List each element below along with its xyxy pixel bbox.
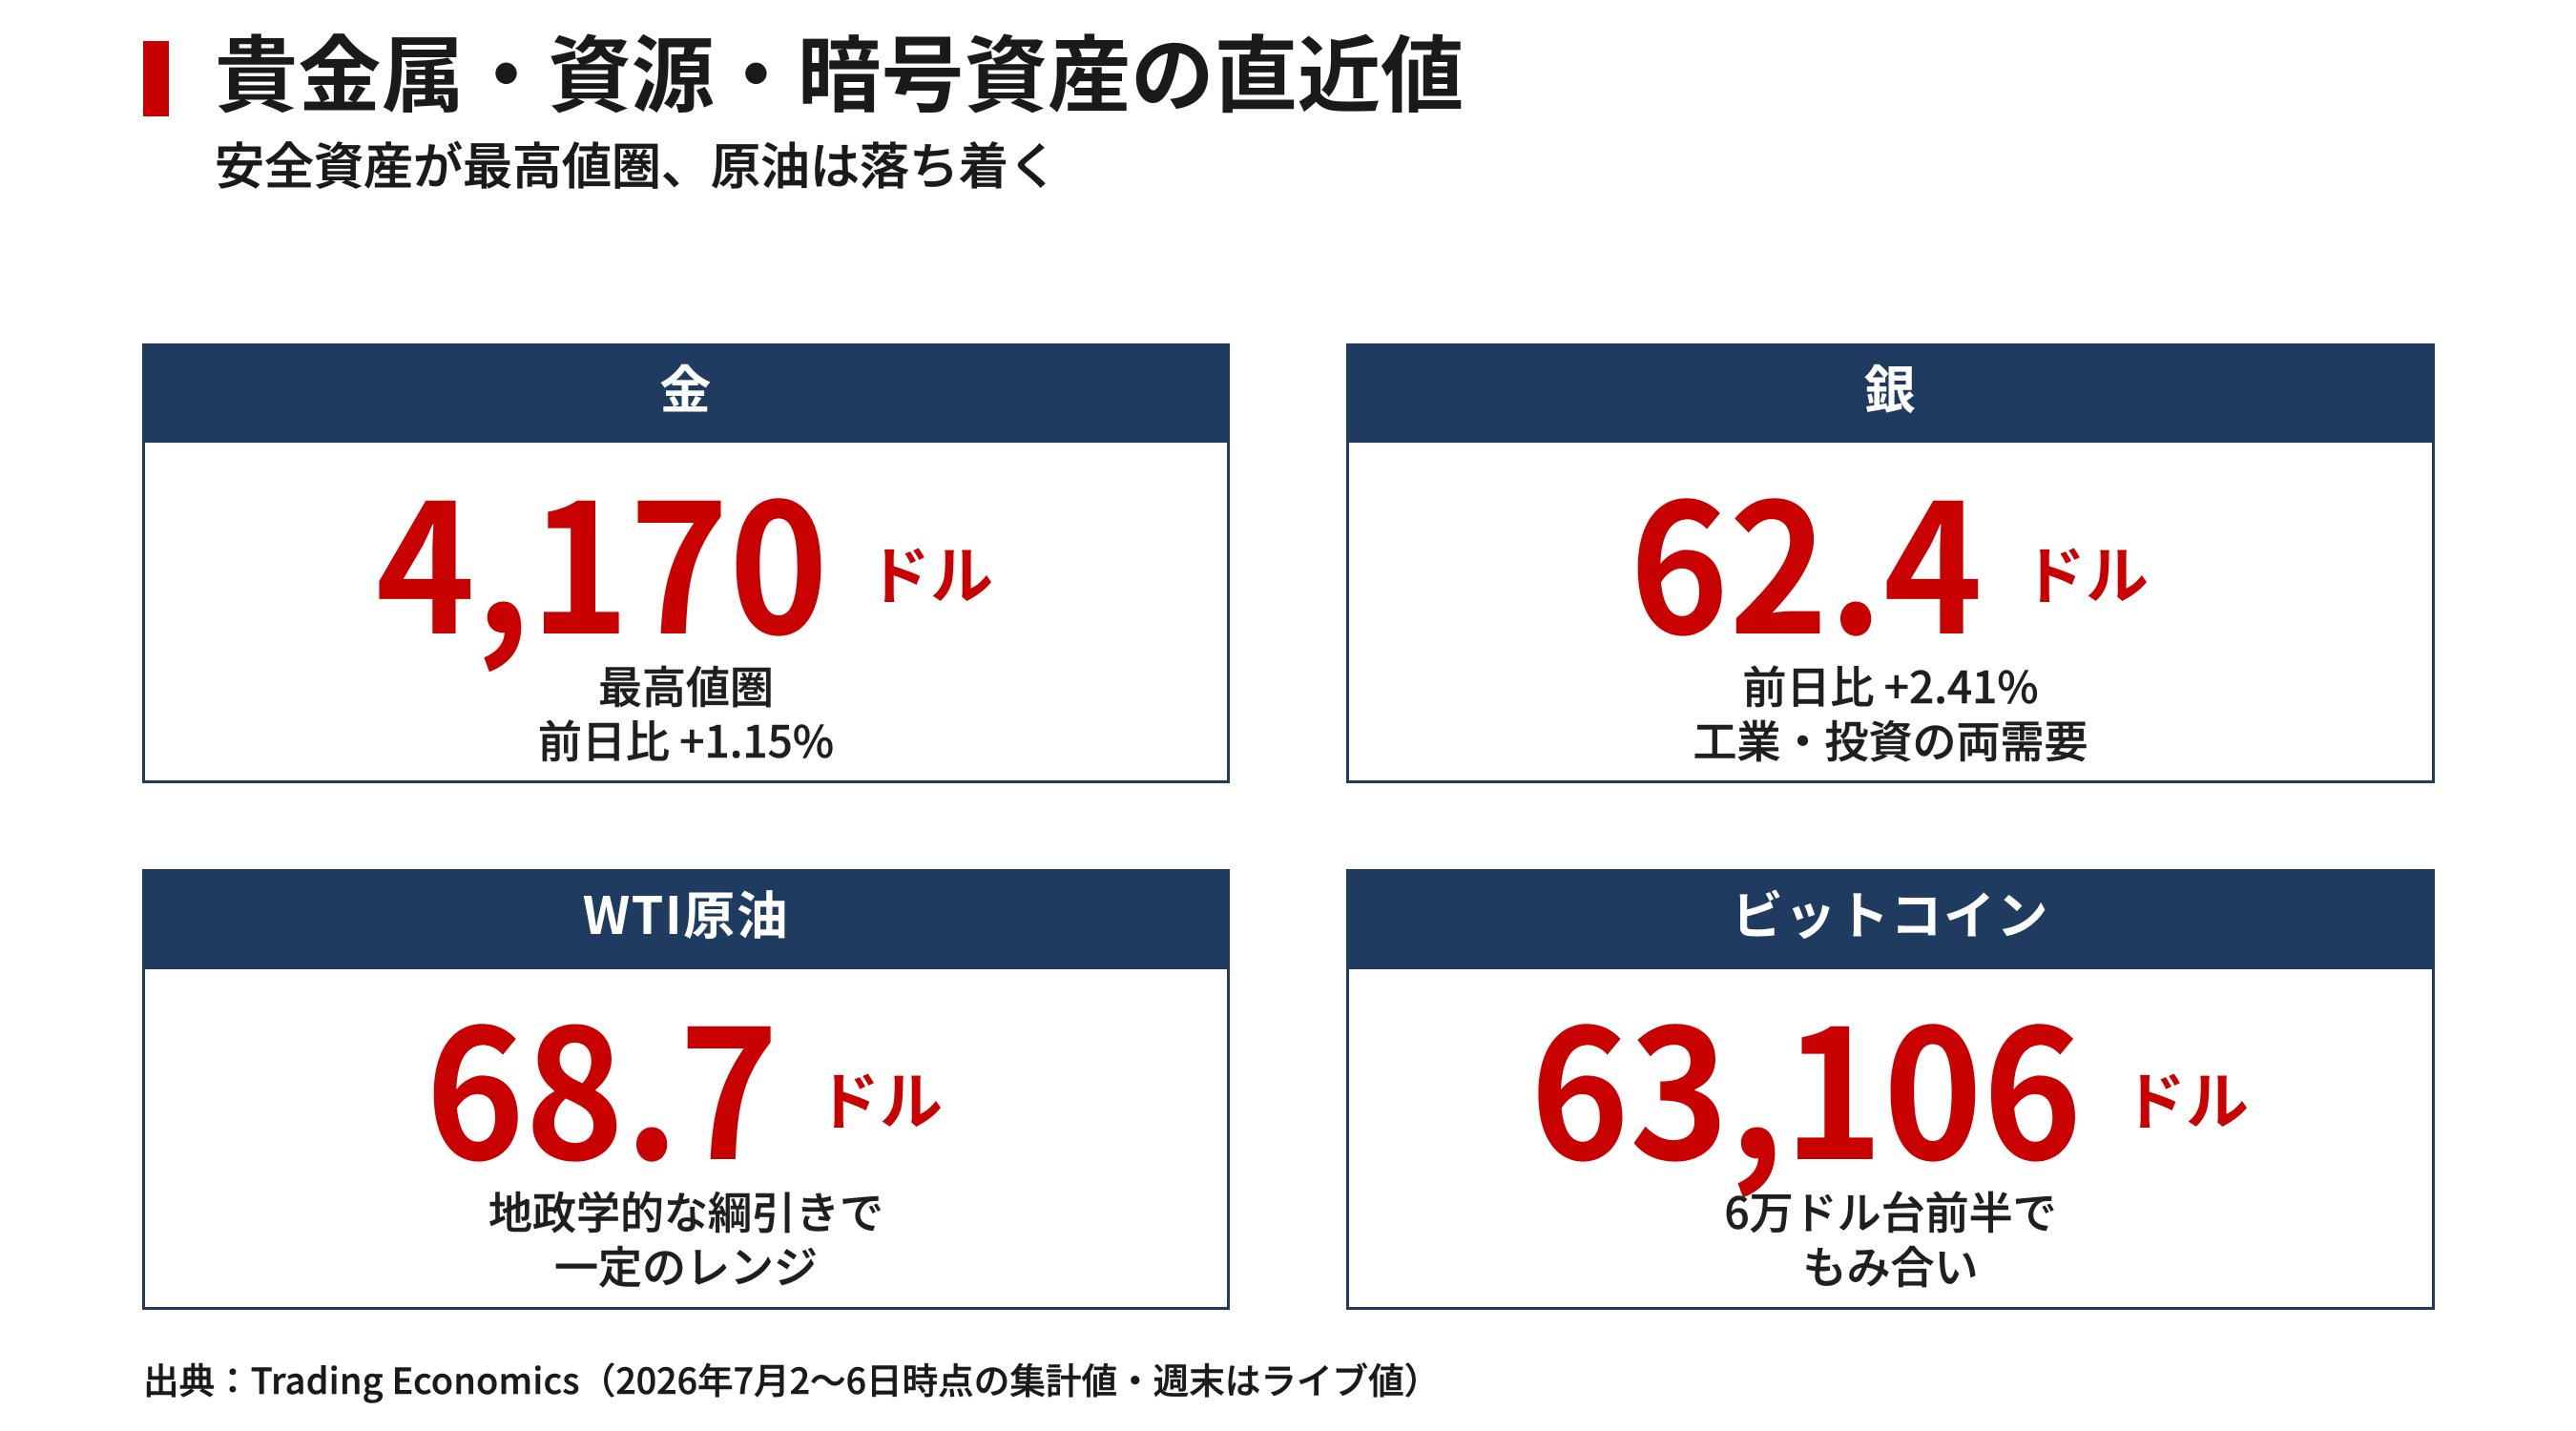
- note: gold: 前日比 +1.15%: [538, 708, 834, 771]
- note: bitcoin: もみ合い: [1803, 1234, 1979, 1296]
- value: gold price: 4,170: [376, 426, 828, 686]
- note: WTI: 一定のレンジ: [554, 1234, 818, 1296]
- panel heading: gold: [142, 343, 1230, 443]
- note: gold: 最高値圏: [598, 653, 774, 716]
- unit: gold: ドル: [867, 526, 993, 617]
- note: bitcoin: [1724, 1179, 2057, 1296]
- panel heading: silver: [1346, 343, 2435, 443]
- unit: silver: ドル: [2023, 526, 2149, 617]
- panel heading: gold: 金: [659, 348, 713, 424]
- title accent bar: [143, 41, 169, 116]
- value: silver price: 62.4: [1630, 426, 1983, 686]
- note: silver: [1693, 653, 2088, 771]
- panel: gold: [142, 343, 1230, 783]
- panel heading: bitcoin: ビットコイン: [1732, 874, 2049, 949]
- note: WTI: 地政学的な綱引きで: [488, 1179, 883, 1242]
- panel heading: WTI crude: [142, 869, 1230, 969]
- unit: bitcoin: ドル: [2123, 1051, 2249, 1143]
- note: WTI: [488, 1179, 883, 1296]
- value: bitcoin price: 63,106: [1530, 952, 2082, 1212]
- panel: silver: [1346, 343, 2435, 783]
- value: WTI price: 68.7: [426, 952, 779, 1212]
- panel heading: silver: 銀: [1864, 348, 1917, 424]
- panel: bitcoin: [1346, 869, 2435, 1310]
- source note: 出典：Trading Economics（2026年7月2〜6日時点の集計値・週末はライブ値）: [143, 1352, 1440, 1404]
- unit: WTI: ドル: [817, 1051, 943, 1143]
- panel heading: bitcoin: [1346, 869, 2435, 969]
- subtitle: 安全資産が最高値圏、原油は落ち着く: [215, 127, 1058, 198]
- panel: WTI crude: [142, 869, 1230, 1310]
- note: bitcoin: 6万ドル台前半で: [1724, 1179, 2057, 1242]
- panel heading: WTI crude: WTI原油: [583, 874, 789, 949]
- note: gold: [538, 653, 834, 771]
- title: 貴金属・資源・暗号資産の直近値: [215, 10, 1464, 130]
- note: silver: 工業・投資の両需要: [1693, 708, 2088, 771]
- note: silver: 前日比 +2.41%: [1742, 653, 2039, 716]
